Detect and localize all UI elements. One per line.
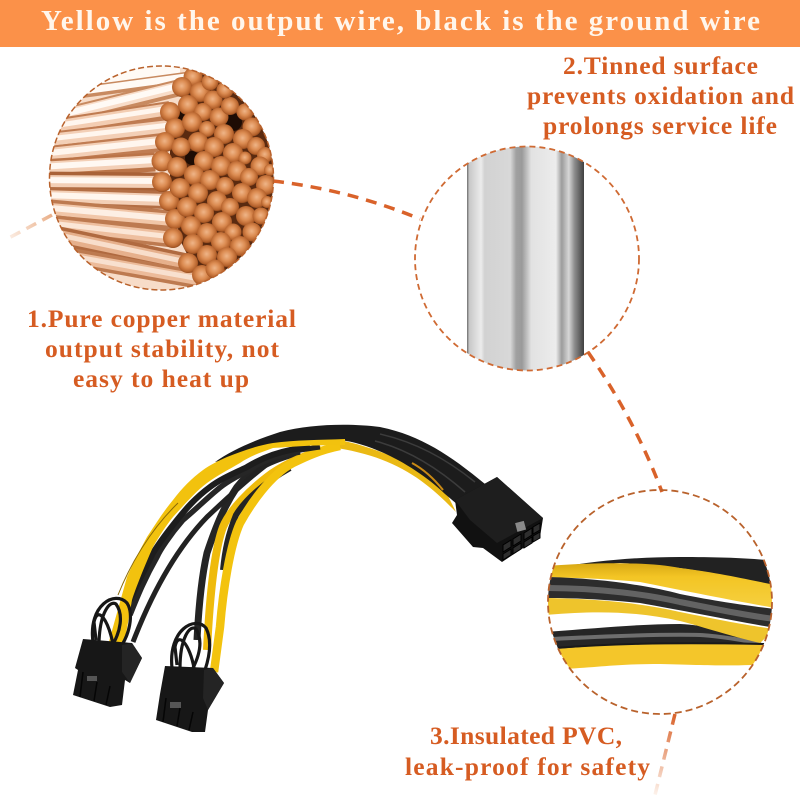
- text: feature 2 tinned surface: [527, 51, 794, 140]
- text: feature 1 copper: output stability, not: [45, 334, 280, 363]
- text: feature 1 copper: [27, 304, 296, 393]
- connector line: tinned to PVC: [588, 352, 662, 492]
- panel: tinned surface circle: [415, 140, 639, 380]
- text: feature 3 PVC: [405, 721, 650, 781]
- connector 1 loops: [92, 598, 130, 645]
- connector line: copper fade-out: [5, 215, 52, 240]
- text: feature 2 tinned surface: prolongs service life: [543, 111, 777, 140]
- panel: PVC insulated wires circle: [545, 490, 775, 714]
- text: feature 2 tinned surface: 2.Tinned surface: [563, 51, 758, 80]
- top banner: [0, 0, 800, 47]
- connector line: copper to tinned: [273, 181, 420, 219]
- dark gaps between strands: [170, 72, 274, 283]
- wires: right branch: [197, 446, 340, 672]
- text: feature 1 copper: 1.Pure copper material: [27, 304, 296, 333]
- top banner: Yellow is the output wire, black is the ground wire: [41, 5, 760, 37]
- copper strand shafts: [40, 76, 200, 280]
- text: feature 1 copper: easy to heat up: [73, 364, 249, 393]
- connector 3 (8 pin): [452, 477, 543, 562]
- text: feature 2 tinned surface: prevents oxidation and: [527, 81, 794, 110]
- strand ends: [152, 68, 276, 285]
- connector 2 loops: [172, 623, 210, 670]
- wires: trunk: [215, 425, 485, 512]
- text: feature 3 PVC: 3.Insulated PVC,: [430, 721, 622, 750]
- connector 1 (6+2 pin): [73, 639, 142, 707]
- pin sockets: [503, 523, 540, 560]
- panel: copper strands circle: [48, 65, 274, 291]
- cable assembly: [73, 425, 543, 732]
- dark holes: [224, 113, 242, 131]
- text: feature 3 PVC: leak-proof for safety: [405, 752, 650, 781]
- connector 2 (6+2 pin): [156, 666, 224, 732]
- wires: left branch: [108, 439, 345, 645]
- connector line: PVC fade-out: [655, 714, 675, 795]
